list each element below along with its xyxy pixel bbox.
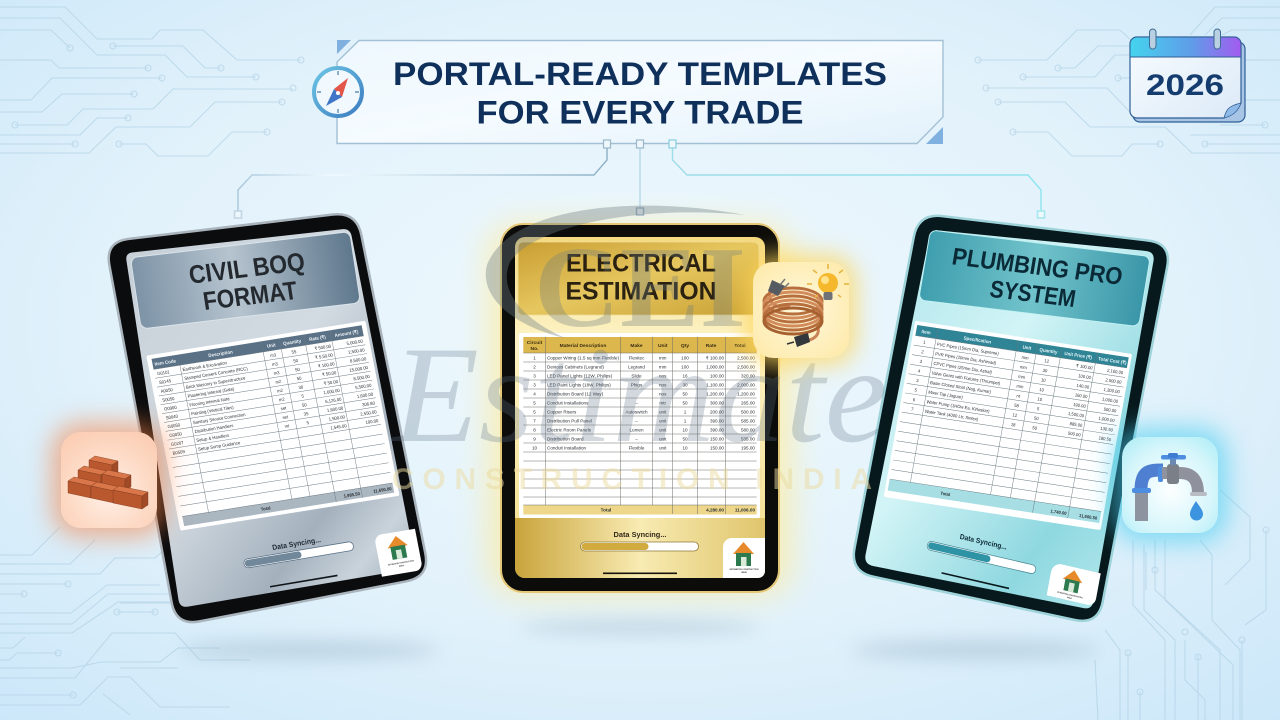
table: plumbing pro: mm <box>1020 364 1028 370</box>
table: electrical estimation: mm <box>659 364 667 370</box>
table: plumbing pro: 1,300.00 <box>1103 387 1121 394</box>
table: electrical estimation: 1 <box>533 356 536 360</box>
table: electrical estimation: 1,200.00 <box>737 392 755 396</box>
table: civil BOQ: 2,500.00 <box>348 347 366 355</box>
table: electrical estimation: 3 <box>533 374 536 378</box>
header panel: CIVIL BOQ <box>187 248 307 290</box>
table: plumbing pro: ₹ 100.00 <box>1076 363 1094 371</box>
table: electrical estimation: unit <box>659 436 667 442</box>
table: civil BOQ: Plastering Internal (Gate) <box>187 386 235 399</box>
table: electrical estimation: 2 <box>533 364 536 370</box>
table: plumbing pro: 12 <box>1012 412 1018 418</box>
watermark: CEI Estimate Construction India: CONSTRUCTION INDIA <box>392 463 872 496</box>
table: electrical estimation: 1,000.00 <box>706 364 724 370</box>
table: plumbing pro: 500.00 <box>1103 407 1117 414</box>
table: electrical estimation: Distribution Board <box>547 436 584 442</box>
header panel <box>130 232 360 329</box>
table: electrical estimation: Distribution Board (12 Way) <box>547 392 604 396</box>
table: electrical estimation: Electric Room Panels <box>547 428 592 432</box>
table: electrical estimation: 500.00 <box>741 410 755 414</box>
table: plumbing pro: 190.00 <box>1073 402 1087 409</box>
table: civil BOQ: 55 <box>291 349 297 355</box>
table: plumbing pro: 7 <box>911 406 915 412</box>
table: plumbing pro: 50 <box>1034 416 1040 421</box>
table: plumbing pro: Total <box>940 491 951 497</box>
table: civil BOQ: 50 <box>293 358 299 364</box>
table: civil BOQ: G0050 <box>167 422 181 429</box>
table: civil BOQ: G0101 <box>157 369 171 376</box>
icon: bricks <box>61 432 157 528</box>
table: plumbing pro: 11,600.50 <box>1079 513 1098 521</box>
table: civil BOQ: 8,500.00 <box>353 374 371 381</box>
table: civil BOQ: 35 <box>303 411 309 417</box>
table: electrical estimation: 200.00 <box>710 410 724 414</box>
table: electrical estimation: 10 <box>682 428 688 432</box>
table: electrical estimation: 10 <box>532 446 537 450</box>
table: plumbing pro: CPVC Pipes (25mm Dia, Astral) <box>933 361 993 375</box>
table: plumbing pro: nt <box>1016 393 1021 399</box>
table: plumbing pro: 885.00 <box>1069 421 1083 428</box>
sync progress bar <box>926 527 1039 574</box>
table: electrical estimation: Devices Cabinets (Legrand) <box>547 364 604 370</box>
table: civil BOQ: Total <box>260 505 271 512</box>
table: plumbing pro: Basin Closed Stool (Nag, Kumar) <box>930 380 992 394</box>
table: civil BOQ: 50 <box>296 375 302 381</box>
table: electrical estimation: 300.00 <box>710 400 724 406</box>
table: plumbing pro: 160.00 <box>1074 392 1089 399</box>
table: electrical estimation: Copper Risers <box>547 410 577 414</box>
table: civil BOQ: Description <box>208 349 233 358</box>
table: plumbing pro: 2,500.00 <box>1105 377 1123 385</box>
table: electrical estimation: 3 <box>533 382 536 388</box>
table: electrical estimation: Flexible <box>629 446 645 450</box>
table: plumbing pro: 2,100.00 <box>1107 368 1124 375</box>
table: civil BOQ: Painting (Vertical Tiles) <box>191 405 235 416</box>
header panel: ELECTRICAL <box>566 250 716 278</box>
table: plumbing pro: PVR Pipes (20mm Dia, Ashirvad) <box>935 351 997 366</box>
table: electrical estimation: Rate <box>706 343 717 349</box>
table: electrical estimation: Distribution Pull Panel <box>547 418 592 424</box>
table: civil BOQ: 50 <box>295 367 301 372</box>
table: electrical estimation: 16 <box>682 374 688 378</box>
table: electrical estimation: nos <box>659 374 667 378</box>
table: plumbing pro <box>884 321 1132 530</box>
table: electrical estimation: 390.00 <box>710 428 724 432</box>
icon: calendar 2026 <box>1130 29 1245 122</box>
table: electrical estimation: 9 <box>533 436 536 442</box>
table: electrical estimation: 100.00 <box>710 374 724 378</box>
footer: plumbing <box>923 527 1102 609</box>
table: plumbing pro: 130.50 <box>1100 426 1114 433</box>
table: civil BOQ: 6,126.00 <box>325 396 342 404</box>
table: electrical estimation: No. <box>531 346 539 352</box>
table: electrical estimation: 580.00 <box>741 428 755 432</box>
table: electrical estimation: Copper Wiring (1.5 sq mm Flexible) <box>547 356 619 360</box>
table: electrical estimation: Conduit Installations <box>547 400 589 406</box>
watermark: CEI Estimate Construction India: CEI <box>534 224 746 352</box>
table: plumbing pro: 1,740.00 <box>1050 508 1068 516</box>
table: electrical estimation: 1 <box>684 418 687 424</box>
table: civil BOQ: 5,000.00 <box>346 338 364 346</box>
table: civil BOQ: wt <box>284 423 290 429</box>
table: civil BOQ: G0050 <box>169 431 183 438</box>
table: electrical estimation: unit <box>659 428 667 432</box>
table: plumbing pro: 10 <box>1041 377 1047 383</box>
table: plumbing pro: 6 <box>912 397 916 402</box>
table: electrical estimation: Unit <box>658 343 668 349</box>
table: civil BOQ: B0509 <box>172 449 186 456</box>
connector: right <box>672 147 1044 218</box>
device body <box>501 224 779 592</box>
table: electrical estimation: Total <box>601 508 611 512</box>
table: plumbing pro: PVC Pipes (15mm Dia, Supreme) <box>936 342 1000 356</box>
table: electrical estimation: mm <box>659 356 667 360</box>
table: civil BOQ: Brick Masonry in Superstructure <box>186 375 246 390</box>
table: electrical estimation: Qty <box>681 343 689 349</box>
table: civil BOQ: 1,600.00 <box>323 388 341 395</box>
table: civil BOQ: S0145 <box>158 378 172 385</box>
header panel: FORMAT <box>201 277 299 316</box>
table: civil BOQ: 1,600.00 <box>356 391 374 399</box>
table: electrical estimation: 1,100.00 <box>706 382 724 388</box>
table: civil BOQ: Setup Sump Guidance <box>198 440 241 452</box>
table: electrical estimation: 390.00 <box>710 418 724 424</box>
table: plumbing pro: mm <box>1016 383 1024 390</box>
table: plumbing pro: 1 <box>923 339 926 345</box>
table: civil BOQ: G0207 <box>171 440 185 447</box>
table: civil BOQ: Rate (₹) <box>309 334 327 342</box>
table: civil BOQ: ₹ 50.00 <box>322 370 337 377</box>
table: plumbing pro: 4 <box>918 368 921 374</box>
logo tile: ESTIMATION CONSTRUCTION <box>730 568 759 571</box>
table: electrical estimation: 265.00 <box>741 400 755 406</box>
tablet: civil BOQ format <box>109 214 426 622</box>
table: civil BOQ: Earthwork & Excavation <box>182 360 228 372</box>
table: electrical estimation: nos <box>659 382 667 388</box>
table: electrical estimation: – <box>635 400 638 406</box>
table: plumbing pro: 140.00 <box>1076 383 1090 390</box>
table: plumbing pro: Mixer Tap (Jaguar) <box>928 389 964 400</box>
icon: calendar 2026: 2026 <box>1146 69 1224 102</box>
table: electrical estimation: LED Panel Lights (12W, Philips) <box>547 374 613 378</box>
table: electrical estimation: 195.00 <box>741 446 755 450</box>
table: civil BOQ: Setup & Handlers <box>196 433 230 443</box>
table: civil BOQ: 8,500.00 <box>350 356 367 364</box>
table: electrical estimation: mtr <box>659 400 666 406</box>
table: electrical estimation <box>519 333 760 518</box>
table: electrical estimation: 4 <box>533 392 536 396</box>
sync progress bar: Data Syncing... <box>959 534 1008 552</box>
table: civil BOQ: S0040 <box>165 413 179 420</box>
logo tile: ESTIMATION CONSTRUCTION <box>1057 591 1083 600</box>
icon: water tap <box>1122 437 1218 533</box>
table: electrical estimation: 50 <box>682 400 688 406</box>
table: electrical estimation: Legrand <box>628 364 645 370</box>
table: electrical estimation: 2,500.00 <box>737 356 755 360</box>
table: plumbing pro: 10 <box>1039 387 1045 393</box>
table: civil BOQ: ₹ 100.00 <box>318 361 336 369</box>
table: plumbing pro: Item <box>921 329 931 335</box>
table: plumbing pro: Unit <box>1022 344 1032 351</box>
table: civil BOQ: m2 <box>278 396 286 402</box>
table: civil BOQ: Quantity <box>283 338 302 346</box>
title text <box>393 56 887 130</box>
footer: civil <box>241 520 423 599</box>
sync progress bar: Data Syncing... <box>614 530 666 539</box>
table: electrical estimation: Autoswitch <box>625 410 648 414</box>
table: plumbing pro: Water Pump (1HOw Ea, Kirloskar) <box>926 399 990 414</box>
table: civil BOQ: Unit <box>266 342 276 349</box>
table: plumbing pro: 10 <box>1037 396 1043 402</box>
table: civil BOQ: 5 <box>306 420 310 425</box>
table: plumbing pro: 5 <box>1037 406 1040 412</box>
table: plumbing pro: 5 <box>914 387 918 393</box>
table: electrical estimation: 585.00 <box>741 418 755 424</box>
table: electrical estimation: LED Paint Lights (18W, Philips) <box>547 382 611 388</box>
sync progress bar <box>241 531 354 568</box>
table: electrical estimation: unit <box>659 418 667 424</box>
sync progress bar: Data Syncing... <box>272 536 322 552</box>
table: plumbing pro: 58 <box>1014 403 1020 408</box>
logo tile: INDIA <box>399 564 405 568</box>
logo tile <box>374 529 423 577</box>
sync progress bar <box>580 530 698 551</box>
table: plumbing pro: Total Cost (₹) <box>1098 356 1127 365</box>
table: civil BOQ: m3 <box>273 370 281 376</box>
table: electrical estimation: – <box>635 436 638 442</box>
connector: centre <box>636 147 644 215</box>
title text: FOR EVERY TRADE <box>476 94 804 130</box>
table: civil BOQ: ₹ 50.00 <box>323 379 339 386</box>
table: civil BOQ: 306.80 <box>362 400 376 407</box>
table: civil BOQ: ₹ 5,50.00 <box>315 352 334 360</box>
table: civil BOQ: 1,985.50 <box>343 491 361 499</box>
logo tile: INDIA <box>741 571 747 574</box>
table: electrical estimation: 1,200.00 <box>706 392 724 396</box>
table: electrical estimation: 11,006.00 <box>735 508 755 512</box>
table: civil BOQ: m3 <box>271 361 279 367</box>
header panel: PLUMBING PRO <box>950 244 1124 291</box>
table: civil BOQ: 1,500.00 <box>328 414 346 422</box>
table: civil BOQ: Sanitary Service Connection <box>192 412 246 425</box>
table: plumbing pro: 12 <box>1044 358 1050 364</box>
table: electrical estimation: 150.00 <box>710 446 724 450</box>
table: civil BOQ: S0050 <box>162 396 175 403</box>
floor shadows under the tablets <box>180 620 1100 659</box>
table: civil BOQ: m3 <box>270 352 277 358</box>
table: electrical estimation: – <box>635 418 638 424</box>
table: electrical estimation: 8 <box>533 428 536 432</box>
table: civil BOQ: O0900 <box>164 404 178 412</box>
table: civil BOQ: 11,690.00 <box>373 486 393 494</box>
table: electrical estimation: Material Description <box>560 343 606 349</box>
logo tile: ESTIMATION CONSTRUCTION <box>388 559 415 567</box>
table: plumbing pro: Quantity <box>1039 347 1058 355</box>
table: electrical estimation: 320.00 <box>741 374 755 378</box>
table: civil BOQ: 2,550.00 <box>360 409 378 417</box>
table: electrical estimation: 2,000.00 <box>737 382 755 388</box>
table: electrical estimation: Slide <box>631 374 642 378</box>
table: electrical estimation: 50 <box>682 436 688 442</box>
table: electrical estimation: 150.00 <box>710 436 724 442</box>
table: civil BOQ: 1,545.00 <box>330 423 348 431</box>
table: plumbing pro: Valve Gears with Fixtures (Thrumpet) <box>931 370 1001 386</box>
table: civil BOQ: Flooring Internal Note <box>189 396 231 408</box>
table: electrical estimation: unit <box>659 410 667 414</box>
table: civil BOQ: ₹ 500.00 <box>314 343 332 351</box>
table: plumbing pro: 3 <box>919 359 923 364</box>
table: civil BOQ <box>146 321 400 531</box>
table: civil BOQ: 100.00 <box>365 418 379 425</box>
table: electrical estimation: ₹ 100.00 <box>706 356 724 360</box>
table: plumbing pro: 180.50 <box>1098 435 1112 442</box>
table: electrical estimation: Circuit <box>527 340 543 346</box>
table: electrical estimation: Make <box>630 343 643 349</box>
glow behind the electrical tablet <box>488 225 792 595</box>
table: electrical estimation: 50 <box>682 392 688 396</box>
home indicator <box>941 572 1009 589</box>
table: electrical estimation: Lumen <box>629 428 644 432</box>
table: plumbing pro: mm <box>1021 355 1029 361</box>
title panel <box>337 40 943 148</box>
table: plumbing pro: Water Tank (4000 Ltr, Sintex) <box>925 409 979 422</box>
table: plumbing pro: Specification <box>963 335 992 345</box>
table: civil BOQ: 50 <box>302 402 308 408</box>
table: electrical estimation: 10 <box>682 446 688 450</box>
table: plumbing pro: 100.00 <box>1078 373 1092 380</box>
home indicator <box>270 575 338 588</box>
table: electrical estimation: 100 <box>681 356 689 360</box>
tablet: plumbing pro system <box>854 216 1168 621</box>
table: plumbing pro: Unit Price (₹) <box>1064 351 1093 360</box>
table: electrical estimation: Total <box>734 343 746 349</box>
table: plumbing pro: 1,000.00 <box>1098 416 1116 423</box>
table: electrical estimation: 5 <box>533 410 536 414</box>
table: electrical estimation: 1 <box>684 410 687 414</box>
table: civil BOQ: m2 <box>277 388 284 394</box>
table: electrical estimation: Conduit Installation <box>547 446 587 450</box>
table: civil BOQ: 1,600.00 <box>326 405 344 413</box>
table: civil BOQ: Amount (₹) <box>334 329 359 338</box>
home indicator <box>603 572 677 574</box>
table: civil BOQ: 5,500.00 <box>355 382 372 390</box>
header panel <box>919 230 1150 327</box>
table: electrical estimation: 5 <box>533 400 536 406</box>
table: plumbing pro: 1,500.00 <box>1068 411 1085 418</box>
table: electrical estimation: Phigs <box>631 382 643 388</box>
table: plumbing pro: 500.00 <box>1068 431 1082 438</box>
table: civil BOQ: 30 <box>298 384 304 390</box>
table: civil BOQ: Stamped Cement Concrete (RCC) <box>184 366 249 381</box>
icon: compass <box>314 68 362 116</box>
table: civil BOQ: set <box>280 405 288 411</box>
table: electrical estimation: 2,500.00 <box>737 364 755 370</box>
table: electrical estimation: nos <box>659 392 667 396</box>
table: plumbing pro: 50 <box>1032 425 1038 431</box>
logo tile <box>723 538 765 578</box>
header panel: ESTIMATION <box>566 278 716 306</box>
table: civil BOQ: set <box>282 414 289 420</box>
logo tile <box>1047 562 1101 606</box>
table: electrical estimation: Flexitec <box>629 356 645 360</box>
table: electrical estimation: 7 <box>533 418 536 424</box>
table: plumbing pro: 2 <box>921 349 925 355</box>
logo tile: INDIA <box>1067 596 1073 600</box>
table: plumbing pro: 30 <box>1042 368 1048 374</box>
table: plumbing pro: 3 <box>916 378 920 383</box>
watermark: CEI Estimate Construction India: Estimate <box>390 318 888 471</box>
table: electrical estimation: 100 <box>681 364 689 370</box>
table: civil BOQ: A0050 <box>160 387 174 394</box>
table: civil BOQ: Distribution Handlers <box>194 423 235 434</box>
table: plumbing pro: mm <box>1018 374 1026 380</box>
table: civil BOQ: 5 <box>301 393 305 399</box>
table: civil BOQ: Item Code <box>154 358 177 367</box>
title text: PORTAL-READY TEMPLATES <box>393 56 887 92</box>
table: electrical estimation: 30 <box>682 382 688 388</box>
header panel: SYSTEM <box>988 276 1078 313</box>
table: electrical estimation: 535.00 <box>741 436 755 442</box>
table: electrical estimation: unit <box>659 446 667 450</box>
table: civil BOQ: 15,000.00 <box>349 365 369 373</box>
table: civil BOQ: m2 <box>275 379 282 385</box>
table: electrical estimation: 4,280.00 <box>706 508 724 512</box>
table: plumbing pro: 1,000.00 <box>1102 396 1119 404</box>
table: plumbing pro: 18 <box>1010 422 1016 428</box>
icon: copper cable and bulb <box>753 262 849 358</box>
tablet: electrical estimation <box>500 223 780 593</box>
header panel <box>518 242 759 315</box>
connector: left <box>234 147 607 218</box>
